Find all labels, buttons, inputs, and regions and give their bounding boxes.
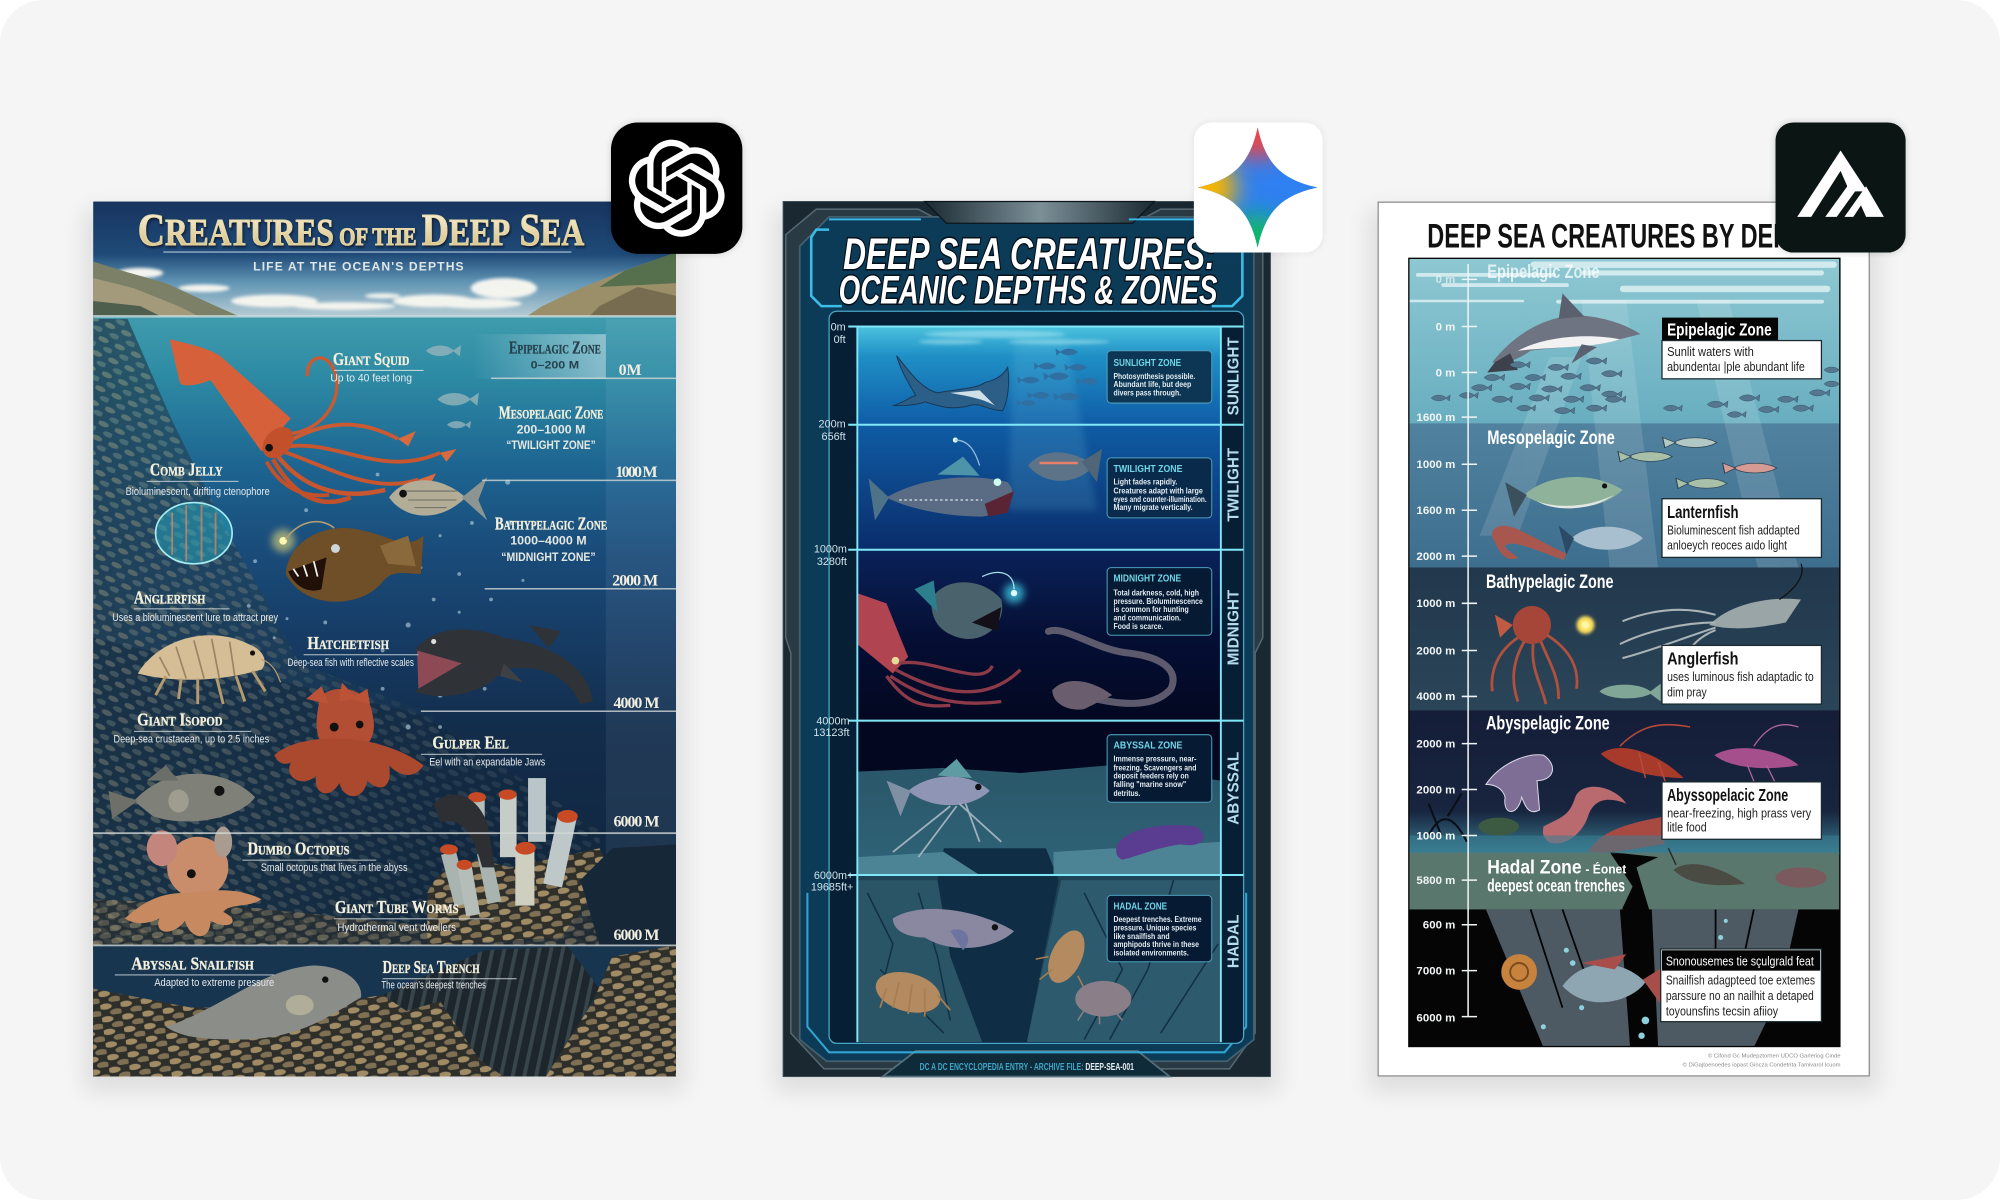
depth labels: 2000 m <box>1416 784 1455 796</box>
label: mesopelagic zone <box>498 406 603 449</box>
label: dumbo octopus: Dumbo Octopus <box>247 839 349 859</box>
label: giant squid: Giant Squid <box>333 349 409 369</box>
trench black <box>1409 909 1839 1047</box>
label: comb jelly: Bioluminescent, drifting ctenophore <box>126 486 270 498</box>
label: abyssal snailfish: Abyssal Snailfish <box>131 953 254 973</box>
white sheet <box>1378 202 1869 1076</box>
right cliff <box>523 253 676 319</box>
callout: hadal zone: amphipods thrive in these <box>1114 940 1200 949</box>
ocean water <box>93 316 676 1077</box>
chart frame <box>829 311 1244 1043</box>
clouds <box>117 268 537 310</box>
panel: ChatGPT poster, Creatures of the Deep Sea <box>84 202 685 1092</box>
metal outer frame <box>783 202 1270 1077</box>
callout: anglerfish <box>1662 645 1821 704</box>
comb jelly <box>156 503 232 564</box>
grey fish <box>108 765 255 821</box>
callout: sunlight zone: Abundant life, but deep <box>1114 380 1191 389</box>
amphipod left <box>871 965 950 1019</box>
callout: snailfish: parssure no an nailhit a detaped <box>1666 988 1814 1003</box>
label: dumbo octopus <box>242 839 408 874</box>
scale lines <box>848 326 1244 1042</box>
callout: twilight zone: Light fades rapidly. <box>1114 478 1177 487</box>
callout: hadal zone: like snailfish and <box>1114 932 1170 941</box>
depth labels: 1000 m <box>1416 598 1455 610</box>
callout: abyssopelacic zone: litle food <box>1667 820 1707 835</box>
panel: third poster, Deep Sea Creatures by Depth <box>1369 202 1879 1092</box>
dumbo octopus <box>125 827 261 936</box>
trench walls <box>383 946 599 1077</box>
label: epipelagic zone <box>509 341 600 368</box>
label: deep sea trench: Deep Sea Trench <box>383 957 480 977</box>
label: bathypelagic zone: “MIDNIGHT ZONE” <box>501 550 596 564</box>
panel: Gemini poster, Deep Sea Creatures Oceanic Depths and Zones <box>774 202 1279 1092</box>
depth labels: 7000 m <box>1416 965 1455 977</box>
depth scale labels: 6000m+ <box>814 870 853 882</box>
dark coral left <box>1429 793 1467 842</box>
sea cucumber <box>1116 825 1204 860</box>
spotted fish <box>1588 816 1665 853</box>
right dark rock <box>580 844 676 945</box>
depth axis <box>1462 264 1477 1017</box>
zone: abyssal water <box>857 721 1221 875</box>
callout: abyssal zone: deposit feeders rely on <box>1114 772 1189 781</box>
callout: snailfish <box>1661 949 1821 1022</box>
callout: epipelagic zone: abundentaı |ple abundant life <box>1667 359 1805 374</box>
depth scale labels <box>811 321 853 893</box>
trench <box>938 848 1059 1042</box>
vent mound <box>427 848 610 945</box>
title rule <box>163 251 571 253</box>
depth labels: 6000 m <box>1416 1013 1455 1025</box>
depth labels <box>1416 274 1455 1025</box>
deep fish with stilts <box>886 759 1001 857</box>
callout: midnight zone: Food is scarce. <box>1114 622 1163 631</box>
anglerfish <box>272 522 423 602</box>
callout: hadal zone: pressure. Unique species <box>1114 923 1197 932</box>
left rock wall <box>93 319 440 950</box>
icon: ChatGPT logo <box>611 122 742 254</box>
fish school <box>1017 348 1098 406</box>
light rays <box>1008 332 1097 510</box>
zone: midnight water <box>857 550 1221 721</box>
callout: midnight zone: pressure. Bioluminescence <box>1114 597 1203 606</box>
hadal heading: Hadal Zone <box>1487 858 1582 879</box>
chart frame <box>1408 258 1841 1047</box>
zone: epipelagic <box>1409 259 1839 423</box>
label: hatchetfish: Hatchetfish <box>307 633 389 653</box>
vertical zone labels: MIDNIGHT <box>1226 589 1243 665</box>
depth labels: 2000 m <box>1416 645 1455 657</box>
callout: hadal zone: Deepest trenches. Extreme <box>1114 915 1202 924</box>
callout: twilight zone: Creatures adapt with large <box>1114 487 1203 496</box>
outer metal edge <box>786 209 1263 1069</box>
depth scale labels: 200m <box>819 418 846 430</box>
label: anglerfish <box>112 587 278 624</box>
vertical zone labels: ABYSSAL <box>1226 752 1243 825</box>
callout: twilight zone: eyes and counter-illumination. <box>1114 495 1207 504</box>
seafloor crawler <box>1668 848 1745 885</box>
viperfish <box>869 438 1014 520</box>
green fish <box>1505 477 1622 517</box>
hadal heading: deepest ocean trenches <box>1487 876 1625 896</box>
trench rim <box>857 842 1221 875</box>
callout: abyssopelacic zone: near-freezing, high prass very <box>1667 806 1812 821</box>
zone: sunlight water <box>857 327 1221 425</box>
zone: twilight water <box>857 425 1221 550</box>
zone: mesopelagic <box>1409 423 1839 568</box>
zone: abyssopelagic <box>1409 710 1839 855</box>
callout: lanternfish: Lanternfish <box>1667 502 1739 522</box>
label: gulper eel: Eel with an expandable Jaws <box>429 756 545 768</box>
depth labels: 2000 m <box>1416 738 1455 750</box>
gulper eel <box>1048 630 1173 710</box>
depth scale labels: 656ft <box>822 431 846 443</box>
label: abyssal snailfish: Adapted to extreme pressure <box>154 977 274 989</box>
small green fish <box>1599 684 1661 702</box>
subtitle: LIFE AT THE OCEAN'S DEPTHS <box>253 259 464 273</box>
hadal fish <box>1562 954 1663 1008</box>
bathypelagic heading: Bathypelagic Zone <box>1486 572 1614 593</box>
callout: midnight zone <box>1107 568 1212 635</box>
callout: hadal zone: isolated environments. <box>1114 948 1189 957</box>
depth labels: 4000 m <box>1416 691 1455 703</box>
footer credits <box>1683 1052 1841 1068</box>
title bracket <box>811 230 1242 306</box>
depth labels: 0 m <box>1436 367 1455 379</box>
zone: bathypelagic <box>1409 568 1839 710</box>
depth labels: 1000 m <box>1416 459 1455 471</box>
red anglerfish octopus <box>1492 606 1594 704</box>
label: hatchetfish <box>288 633 418 669</box>
callout: sunlight zone: SUNLIGHT ZONE <box>1114 358 1181 369</box>
hadal right rock <box>1027 880 1221 1042</box>
callout: midnight zone: is common for hunting <box>1114 605 1189 614</box>
trench cliffs <box>1486 909 1798 1047</box>
depth scale labels: 4000m <box>816 715 849 727</box>
snailfish <box>893 909 1014 950</box>
callout: lanternfish <box>1662 499 1821 557</box>
midnight anglerfish <box>915 572 1024 639</box>
callout: hadal zone: HADAL ZONE <box>1114 901 1167 912</box>
abyssopelagic heading: Abyspelagic Zone <box>1486 714 1610 735</box>
label: epipelagic zone: 0–200 M <box>531 360 579 372</box>
depth labels: 600 m <box>1423 920 1455 932</box>
abyssal seabed <box>857 765 1221 875</box>
depth 4000 m: 4000 M <box>614 695 659 712</box>
depth scale labels: 0m <box>831 321 846 333</box>
light rays <box>1480 300 1798 568</box>
red octopus <box>274 682 423 796</box>
frame side accents <box>807 219 1246 1052</box>
bubbles <box>247 473 551 730</box>
label: giant squid: Up to 40 feet long <box>330 372 412 384</box>
icon: third logo <box>1776 122 1906 253</box>
depth scale labels: 19685ft+ <box>811 881 853 893</box>
surface ripples <box>1409 261 1837 304</box>
small fish group <box>426 345 479 429</box>
callout: abyssal zone: Immense pressure, near- <box>1114 754 1197 763</box>
depth scale labels: 0ft <box>834 334 846 346</box>
callout: epipelagic zone: Sunlit waters with <box>1667 344 1754 359</box>
epipelagic heading: Epipelagic Zone <box>1487 262 1599 283</box>
callout: hadal zone <box>1107 895 1212 962</box>
depth labels: 1600 m <box>1416 505 1455 517</box>
depth 6000 m upper: 6000 M <box>614 814 659 831</box>
title: OCEANIC DEPTHS & ZONES <box>839 269 1217 313</box>
label: giant isopod <box>114 710 269 745</box>
depth 2000 m: 2000 M <box>612 572 658 589</box>
giant squid <box>170 339 457 502</box>
blue fish <box>1559 526 1643 555</box>
red squid <box>857 593 1020 706</box>
callout: anglerfish: dim pray <box>1667 684 1707 699</box>
left cliff <box>93 261 245 319</box>
depth scale labels: 13123ft <box>813 727 849 739</box>
hatchetfish <box>1028 449 1102 482</box>
callout: sunlight zone: Photosynthesis possible. <box>1114 372 1195 381</box>
callout: sunlight zone: divers pass through. <box>1114 388 1181 397</box>
label: giant tube worms: Hydrothermal vent dwellers <box>337 922 456 934</box>
callout: lanternfish: anloeych reoces aıdo light <box>1667 538 1787 553</box>
label: bathypelagic zone <box>495 513 607 564</box>
green crab <box>1478 818 1519 835</box>
zone: hadal rock <box>857 875 1221 1042</box>
callout: snailfish: Snailfish adagpteed toe extemes <box>1666 973 1815 988</box>
inner blue plate <box>800 217 1254 1061</box>
label: anglerfish: Anglerfish <box>134 587 205 607</box>
depth labels: 0 m <box>1436 321 1455 333</box>
surface line <box>93 315 676 318</box>
callout: abyssal zone <box>1107 735 1212 802</box>
depth labels: 5800 m <box>1416 875 1455 887</box>
label: giant squid <box>331 352 424 384</box>
callout: abyssopelacic zone <box>1662 782 1821 839</box>
poster sky background <box>93 202 676 319</box>
callout: anglerfish: Anglerfish <box>1667 649 1739 669</box>
vertical zone labels: SUNLIGHT <box>1226 337 1243 415</box>
label: comb jelly: Comb Jelly <box>150 460 223 480</box>
label: giant tube worms <box>334 897 494 934</box>
label: gulper eel: Gulper Eel <box>432 733 509 753</box>
label: giant isopod: Deep-sea crustacean, up to 2.5 inches <box>114 733 269 745</box>
bottom seabed <box>93 989 523 1077</box>
depth labels: 1600 m <box>1416 412 1455 424</box>
mesopelagic heading: Mesopelagic Zone <box>1487 428 1615 449</box>
lower band water <box>93 945 676 1077</box>
teal seabed band <box>1409 835 1839 853</box>
callout: epipelagic zone: Epipelagic Zone <box>1667 319 1772 339</box>
rock cracks <box>867 880 1218 1040</box>
icon: Gemini logo <box>1175 97 1323 276</box>
label: hatchetfish: Deep-sea fish with reflective scales <box>288 657 414 669</box>
footer: DC A DC ENCYCLOPEDIA ENTRY - ARCHIVE FILE: DEEP-SEA-001 <box>920 1062 1134 1073</box>
title <box>839 230 1217 313</box>
callout: midnight zone: Total darkness, cold, high <box>1114 589 1199 598</box>
vertical zone labels: TWILIGHT <box>1226 447 1243 522</box>
label: deep sea trench <box>381 957 517 992</box>
deep scale texture <box>93 638 599 950</box>
fish school <box>1431 358 1843 418</box>
vertical zone labels: HADAL <box>1226 915 1243 968</box>
callout: abyssal zone: falling "marine snow" <box>1114 780 1186 789</box>
label: abyssal snailfish <box>115 953 274 989</box>
label: gulper eel <box>421 733 545 768</box>
label: epipelagic zone: Epipelagic Zone <box>509 337 601 357</box>
rock fissures <box>1531 909 1754 1008</box>
callout: snailfish: Snonousemes tie sçulɡrald feat <box>1666 954 1814 969</box>
label: comb jelly <box>126 460 270 498</box>
label: mesopelagic zone: Mesopelagic Zone <box>499 402 603 422</box>
silver fish <box>389 477 487 520</box>
zone lines <box>93 378 676 946</box>
callout: epipelagic zone <box>1662 318 1821 379</box>
zone: hadal seafloor <box>1409 852 1839 909</box>
label: bathypelagic zone: 1000–4000 M <box>510 534 587 548</box>
depth scale labels: 3280ft <box>817 556 847 568</box>
abyssal snailfish <box>166 966 361 1040</box>
vertical zone labels <box>1226 337 1243 968</box>
callout: snailfish: toyounsfins tecsin afiioy <box>1666 1003 1779 1018</box>
manta ray <box>893 356 1009 411</box>
label: anglerfish: Uses a bioluminescent lure to attract prey <box>112 612 278 624</box>
callout: abyssal zone: detritus. <box>1114 789 1140 798</box>
top notch <box>925 202 1154 223</box>
gulper eel <box>415 625 593 704</box>
label: mesopelagic zone: 200–1000 M <box>517 423 585 437</box>
hadal heading <box>1487 858 1627 896</box>
trench middle rock <box>406 1002 480 1060</box>
trench crack <box>1610 852 1658 1047</box>
hadal heading: - Éonet <box>1585 862 1627 877</box>
callout: twilight zone: TWILIGHT ZONE <box>1114 464 1183 475</box>
giant isopod <box>138 635 281 704</box>
label: giant isopod: Giant Isopod <box>137 710 223 730</box>
callout: twilight zone: Many migrate vertically. <box>1114 503 1193 512</box>
red shrimp <box>1601 725 1690 797</box>
callout: sunlight zone <box>1107 351 1212 403</box>
callout: midnight zone: MIDNIGHT ZONE <box>1114 574 1181 585</box>
amphipod middle <box>1036 925 1092 989</box>
red worm <box>1492 526 1566 560</box>
callout: twilight zone <box>1107 458 1212 518</box>
label: deep sea trench: The ocean's deepest trenches <box>381 980 486 992</box>
callout: midnight zone: and communication. <box>1114 614 1181 623</box>
jelly creature <box>1486 755 1553 812</box>
footer credits: © DiGajtoenoedes iopast Gincza Condetrita Tamivarol Icuom <box>1683 1061 1841 1068</box>
callout: anglerfish: uses luminous fish adaptadic to <box>1667 669 1814 684</box>
depth column overlay <box>606 319 676 854</box>
title: CREATURES OF THE DEEP SEA <box>138 204 584 255</box>
depth 1000 m: 1000 M <box>615 464 658 481</box>
dolphin <box>1487 293 1640 372</box>
bottom notch <box>883 1051 1170 1077</box>
footer credits: © Cifond Gc Mudepztorhen UDCO Garleriog Cinde <box>1708 1052 1841 1059</box>
seafloor rock <box>1776 867 1827 888</box>
callout: abyssal zone: ABYSSAL ZONE <box>1114 741 1183 752</box>
label: bathypelagic zone: Bathypelagic Zone <box>495 513 607 533</box>
depth labels: 0 m <box>1436 274 1455 286</box>
bubbles <box>1541 919 1728 1039</box>
silver squid creature <box>1620 564 1802 676</box>
epipelagic highlight <box>472 334 606 379</box>
depth 6000 m lower: 6000 M <box>614 927 659 944</box>
callout: lanternfish: Bioluminescent fish addapted <box>1667 522 1800 537</box>
title: DEEP SEA CREATURES BY DEPTH <box>1427 217 1820 255</box>
amphipod right <box>1075 981 1131 1024</box>
right rock <box>546 945 676 1077</box>
label: dumbo octopus: Small octopus that lives in the abyss <box>261 862 408 874</box>
depth labels: 1000 m <box>1416 830 1455 842</box>
depth scale labels: 1000m <box>814 543 847 555</box>
depth 0 m: 0 M <box>619 362 642 379</box>
label: giant tube worms: Giant Tube Worms <box>335 897 459 917</box>
callout: abyssopelacic zone: Abyssopelacic Zone <box>1667 785 1788 805</box>
callout: abyssal zone: freezing. Scavengers and <box>1114 763 1197 772</box>
pink worm <box>1543 787 1626 843</box>
depth labels: 2000 m <box>1416 551 1455 563</box>
label: mesopelagic zone: “TWILIGHT ZONE” <box>506 438 596 452</box>
meso fish group <box>1618 438 1777 489</box>
seabed upper band <box>93 899 599 945</box>
tube worms <box>434 778 578 917</box>
hadal left rock <box>857 880 982 1042</box>
surface ripples <box>918 330 1110 344</box>
ammonite <box>1501 954 1537 990</box>
pink shrimp <box>1714 725 1798 791</box>
title: DEEP SEA CREATURES: <box>843 230 1216 279</box>
